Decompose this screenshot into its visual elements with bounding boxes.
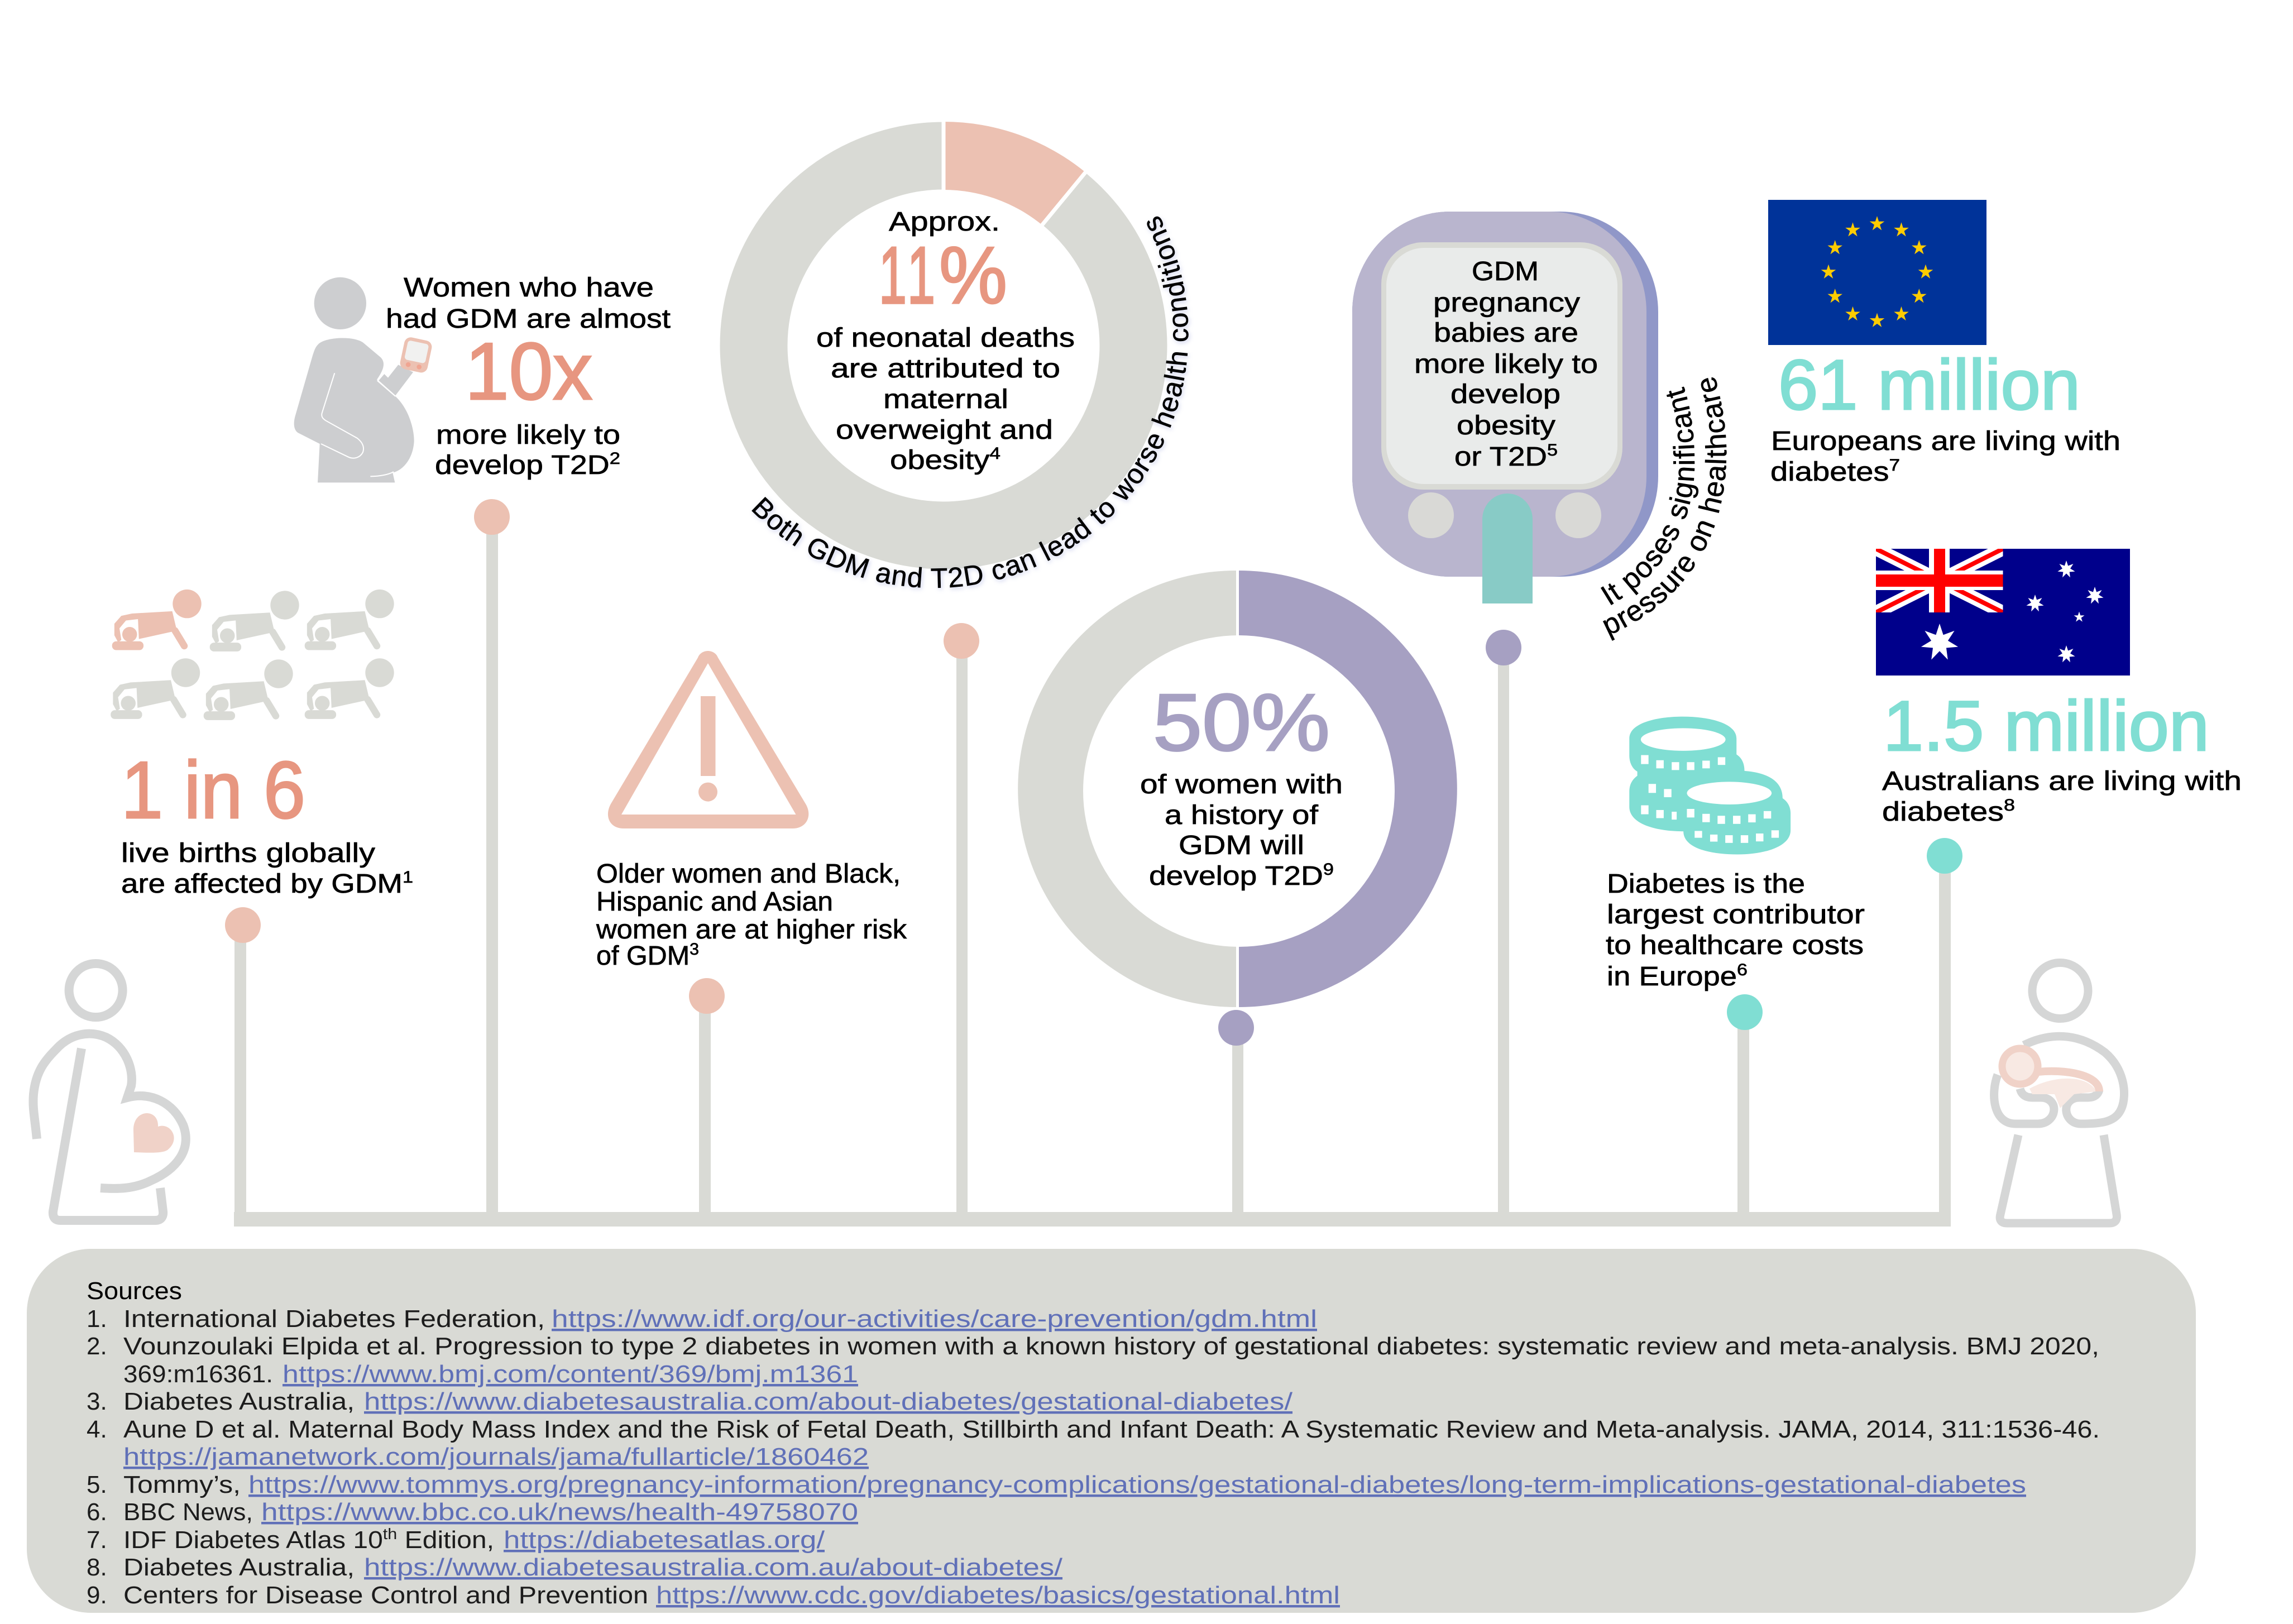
source 3: https://www.diabetesaustralia.com/about-diabetes/gestational-diabetes/	[364, 1388, 1293, 1415]
baby 4	[111, 658, 200, 719]
source 3: 3.	[87, 1388, 107, 1415]
text: neonatal deaths: 1	[879, 230, 907, 320]
source 9	[87, 1582, 1340, 1609]
source 9: Centers for Disease Control and Prevention	[123, 1582, 648, 1609]
timeline baseline	[234, 1212, 1951, 1227]
marker: neonatal deaths	[944, 623, 979, 1214]
text: meter screen	[1414, 257, 1598, 472]
source 3	[87, 1388, 1293, 1415]
icon: heart in belly	[133, 1113, 174, 1153]
icon: handheld meter	[399, 336, 433, 374]
icon: baby in arms	[2002, 1048, 2099, 1108]
source 7: https://diabetesatlas.org/	[504, 1526, 825, 1554]
source 6	[87, 1498, 858, 1526]
icon: glucose meter	[1352, 212, 1658, 603]
source 8: https://www.diabetesaustralia.com.au/about-diabetes/	[364, 1554, 1063, 1581]
baby 5	[204, 659, 293, 720]
stat: 61 million: 61 million	[1778, 345, 2080, 424]
baby 1 highlighted	[112, 590, 202, 650]
source 1: 1.	[87, 1305, 107, 1333]
text: meter screen: GDM	[1472, 257, 1539, 286]
icon: stacked coins	[1629, 717, 1791, 855]
icon: pregnant woman with glucose meter	[294, 277, 433, 482]
curved text: pressure on healthcare: pressure on healthcare	[1602, 377, 1727, 641]
source 4: https://jamanetwork.com/journals/jama/fullarticle/1860462	[123, 1443, 869, 1470]
text: meter screen: or T2D	[1454, 442, 1536, 472]
source 7: th	[383, 1525, 397, 1542]
source 1: https://www.idf.org/our-activities/care-prevention/gdm.html	[552, 1305, 1317, 1333]
marker: 10x	[474, 499, 510, 1215]
marker: glucose meter	[1486, 630, 1521, 1214]
text: healthcare costs	[1606, 869, 1865, 991]
text: 50 percent	[1140, 677, 1343, 891]
marker: 1 in 6	[225, 907, 261, 1227]
panel: sources	[27, 1249, 2196, 1613]
text: neonatal deaths: overweight and	[836, 415, 1053, 445]
text: healthcare costs: 6	[1737, 961, 1748, 979]
stat: 61 million: 7	[1889, 456, 1900, 475]
source 7	[87, 1525, 825, 1554]
icon: Australian flag	[1876, 549, 2130, 676]
source 2: 2.	[87, 1333, 107, 1360]
text: higher risk groups	[596, 859, 907, 971]
text: neonatal deaths: Approx.	[889, 207, 1000, 237]
source 2: https://www.bmj.com/content/369/bmj.m1361	[283, 1360, 858, 1388]
source 9: https://www.cdc.gov/diabetes/basics/gestational.html	[656, 1582, 1340, 1609]
source 5: Tommy’s,	[123, 1471, 241, 1498]
source 4	[87, 1416, 2100, 1470]
text: neonatal deaths	[816, 207, 1075, 475]
text: higher risk groups: Older women and Black,	[596, 859, 901, 889]
source 3: Diabetes Australia,	[123, 1388, 355, 1415]
stat: 10x: develop T2D	[435, 451, 586, 480]
icon: mother holding baby	[1994, 962, 2124, 1223]
source 5: 5.	[87, 1471, 107, 1498]
text: 50 percent: 50%	[1153, 677, 1330, 768]
text: healthcare costs: largest contributor	[1607, 900, 1865, 930]
text: neonatal deaths: obesity	[890, 445, 975, 475]
source 8	[87, 1554, 1063, 1581]
stat: 1.5 million: 8	[2004, 796, 2015, 815]
marker: risk	[689, 978, 725, 1214]
source 6: 6.	[87, 1498, 107, 1526]
stat: 1.5 million: 1.5 million	[1883, 686, 2209, 765]
text: higher risk groups: of GDM	[596, 941, 688, 971]
text: higher risk groups: 3	[690, 940, 699, 959]
source 6: https://www.bbc.co.uk/news/health-49758070	[261, 1498, 858, 1526]
marker: 50 percent	[1218, 1010, 1254, 1214]
source 7: IDF Diabetes Atlas 10	[123, 1526, 361, 1554]
source 2	[87, 1333, 2099, 1388]
stat: 10x: had GDM are almost	[386, 304, 671, 334]
stat: 61 million: Europeans are living with	[1771, 427, 2120, 456]
baby 6	[305, 658, 394, 719]
text: 50 percent: of women with	[1140, 770, 1343, 799]
stat: 10x	[386, 273, 671, 480]
stat: 1 in 6: 1 in 6	[121, 745, 305, 835]
source 2: Vounzoulaki Elpida et al. Progression to type 2 diabetes in women with a known history of gestational diabetes: systematic review and meta-analysis. BMJ 2020,	[123, 1333, 2099, 1360]
stat: 10x: more likely to	[436, 420, 620, 450]
stat: 10x: 2	[610, 449, 620, 468]
source 7: Edition,	[397, 1526, 494, 1554]
text: meter screen: more likely to	[1414, 349, 1598, 379]
stat: 1.5 million: Australians are living with	[1882, 767, 2242, 796]
text: neonatal deaths: 4	[989, 444, 1001, 463]
text: healthcare costs: Diabetes is the	[1607, 869, 1805, 899]
text: neonatal deaths: of neonatal deaths	[816, 323, 1075, 353]
source 7: 7.	[87, 1526, 107, 1554]
marker: healthcare costs	[1727, 994, 1763, 1214]
text: neonatal deaths: %	[939, 230, 1007, 320]
source 9: 9.	[87, 1582, 107, 1609]
icon: warning triangle	[608, 651, 808, 828]
text: 50 percent: GDM will	[1179, 831, 1304, 860]
text: meter screen: pregnancy	[1433, 288, 1580, 318]
text: 50 percent: develop T2D	[1149, 861, 1300, 891]
text: healthcare costs: in Europe	[1607, 962, 1721, 991]
stat: 1.5 million: diabetes	[1882, 797, 1983, 827]
stat: 1 in 6	[121, 745, 413, 899]
text: neonatal deaths: maternal	[883, 385, 1008, 414]
donut chart: 11 percent	[754, 119, 1133, 535]
icon: EU flag	[1768, 200, 1986, 345]
stat: 61 million	[1770, 345, 2120, 487]
source 8: 8.	[87, 1554, 107, 1581]
icon: pregnant woman outline	[33, 964, 186, 1220]
source 6: BBC News,	[123, 1498, 253, 1526]
text: healthcare costs: to healthcare costs	[1606, 931, 1864, 960]
text: higher risk groups: Hispanic and Asian	[596, 887, 833, 917]
text: higher risk groups: women are at higher risk	[596, 915, 907, 945]
donut chart: 50 percent	[1018, 571, 1457, 1007]
marker: Australia	[1927, 838, 1962, 1227]
source 1	[87, 1305, 1317, 1333]
text: 50 percent: a history of	[1165, 801, 1319, 830]
text: meter screen: 5	[1547, 441, 1558, 459]
source 2: 369:m16361.	[123, 1360, 273, 1388]
text: meter screen: babies are	[1434, 318, 1578, 348]
icon: six crawling babies	[111, 590, 394, 720]
text: neonatal deaths: 1	[907, 230, 935, 320]
stat: 10x: 10x	[465, 326, 592, 416]
source 4: Aune D et al. Maternal Body Mass Index and the Risk of Fetal Death, Stillbirth and Infant Death: A Systematic Review and Meta-analysis. JAMA, 2014, 311:1536-46.	[123, 1416, 2100, 1443]
stat: 61 million: diabetes	[1770, 457, 1871, 487]
text: meter screen: develop	[1451, 380, 1560, 409]
curved text: worse health conditions: Both GDM and T2D can lead to worse health conditions	[751, 217, 1191, 591]
stat: 1.5 million	[1882, 686, 2242, 827]
baby 2	[210, 591, 299, 651]
stat: 1 in 6: 1	[403, 868, 413, 887]
source 1: International Diabetes Federation,	[123, 1305, 545, 1333]
baby 3	[305, 590, 394, 650]
source 8: Diabetes Australia,	[123, 1554, 355, 1581]
source 5: https://www.tommys.org/pregnancy-information/pregnancy-complications/gestational-diabetes/long-term-implications-gestational-diabetes	[248, 1471, 2026, 1498]
source 4: 4.	[87, 1416, 107, 1443]
stat: 1 in 6: live births globally	[121, 839, 375, 868]
text: neonatal deaths: are attributed to	[831, 354, 1060, 384]
curved text: pressure on healthcare: It poses significant	[1600, 386, 1698, 605]
text: 50 percent: 9	[1323, 860, 1334, 879]
text: meter screen: obesity	[1457, 411, 1555, 440]
heading: sources: Sources	[87, 1277, 182, 1305]
stat: 1 in 6: are affected by GDM	[121, 869, 368, 899]
stat: 10x: Women who have	[404, 273, 654, 303]
